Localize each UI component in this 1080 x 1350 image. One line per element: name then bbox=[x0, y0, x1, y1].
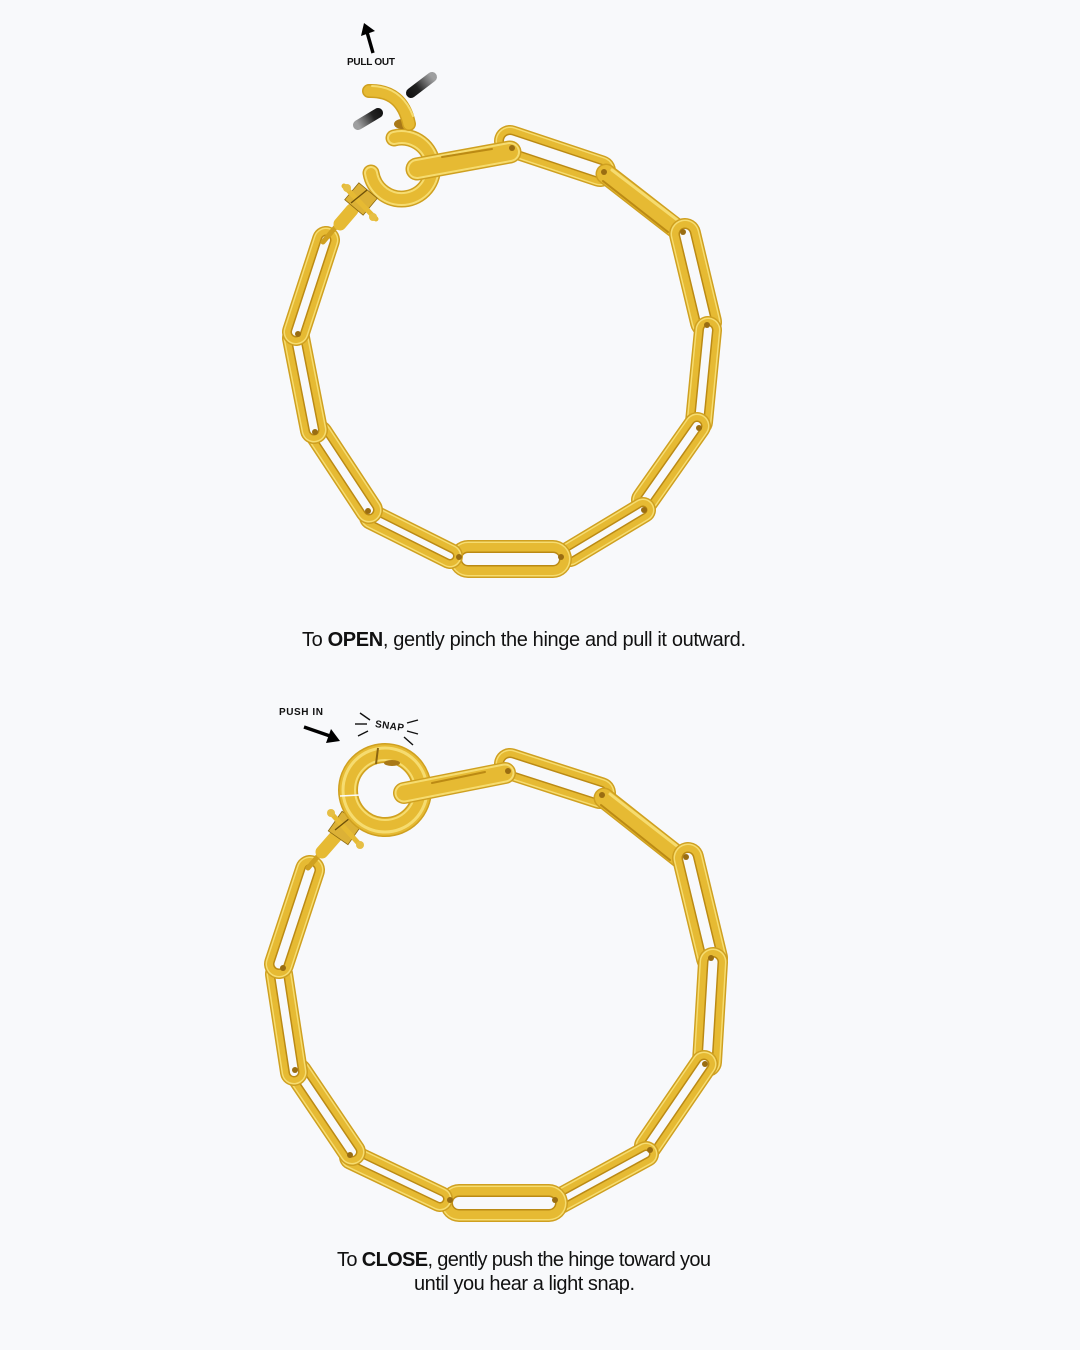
swivel connector bbox=[323, 183, 377, 242]
link 8 bbox=[468, 540, 553, 578]
hinge piece pulled out bbox=[369, 86, 413, 124]
link 8 bbox=[459, 1184, 549, 1222]
hinge ring, closed bbox=[340, 748, 427, 832]
instruction: close: until you hear a light snap. bbox=[414, 1273, 635, 1295]
joint holes bbox=[295, 145, 710, 560]
bracelet: closed (bottom) bbox=[279, 707, 714, 1203]
instruction: close bbox=[337, 1249, 711, 1295]
link 4 bbox=[688, 858, 712, 958]
arrow: push in bbox=[304, 727, 340, 743]
link 4 bbox=[685, 234, 706, 322]
link 12 bbox=[296, 240, 326, 332]
link 2 bbox=[510, 141, 600, 171]
link 6 bbox=[645, 426, 697, 500]
link 3 bbox=[601, 794, 682, 860]
link 5 bbox=[699, 330, 708, 422]
link 5 bbox=[707, 962, 713, 1062]
joint holes bbox=[280, 768, 714, 1203]
label: pull out: PULL OUT bbox=[347, 57, 395, 68]
link 3 bbox=[603, 170, 680, 232]
link 10 bbox=[319, 434, 369, 510]
swivel connector bbox=[308, 809, 364, 868]
link 2 bbox=[510, 764, 600, 793]
link 1 bbox=[417, 149, 510, 169]
link 10 bbox=[298, 1072, 352, 1152]
snap burst: SNAP bbox=[374, 719, 405, 734]
link 6 bbox=[648, 1064, 704, 1146]
link 11 bbox=[279, 974, 294, 1072]
link 7 bbox=[570, 510, 643, 554]
link 9 bbox=[352, 1157, 440, 1199]
instruction: close: To CLOSE, gently push the hinge toward you bbox=[337, 1249, 711, 1271]
instruction: open: To OPEN, gently pinch the hinge and pull it outward. bbox=[302, 629, 746, 651]
hinge clasp, open bbox=[371, 119, 433, 199]
link 11 bbox=[296, 338, 314, 430]
link 12 bbox=[279, 870, 310, 964]
link 7 bbox=[560, 1154, 646, 1201]
label: push in: PUSH IN bbox=[279, 707, 323, 718]
link 1 bbox=[404, 772, 505, 793]
finger pinch shadows bbox=[358, 77, 432, 125]
bracelet: open (top) bbox=[295, 23, 710, 560]
link 9 bbox=[372, 517, 450, 556]
arrow: pull out bbox=[361, 23, 375, 53]
snap burst bbox=[355, 713, 418, 745]
